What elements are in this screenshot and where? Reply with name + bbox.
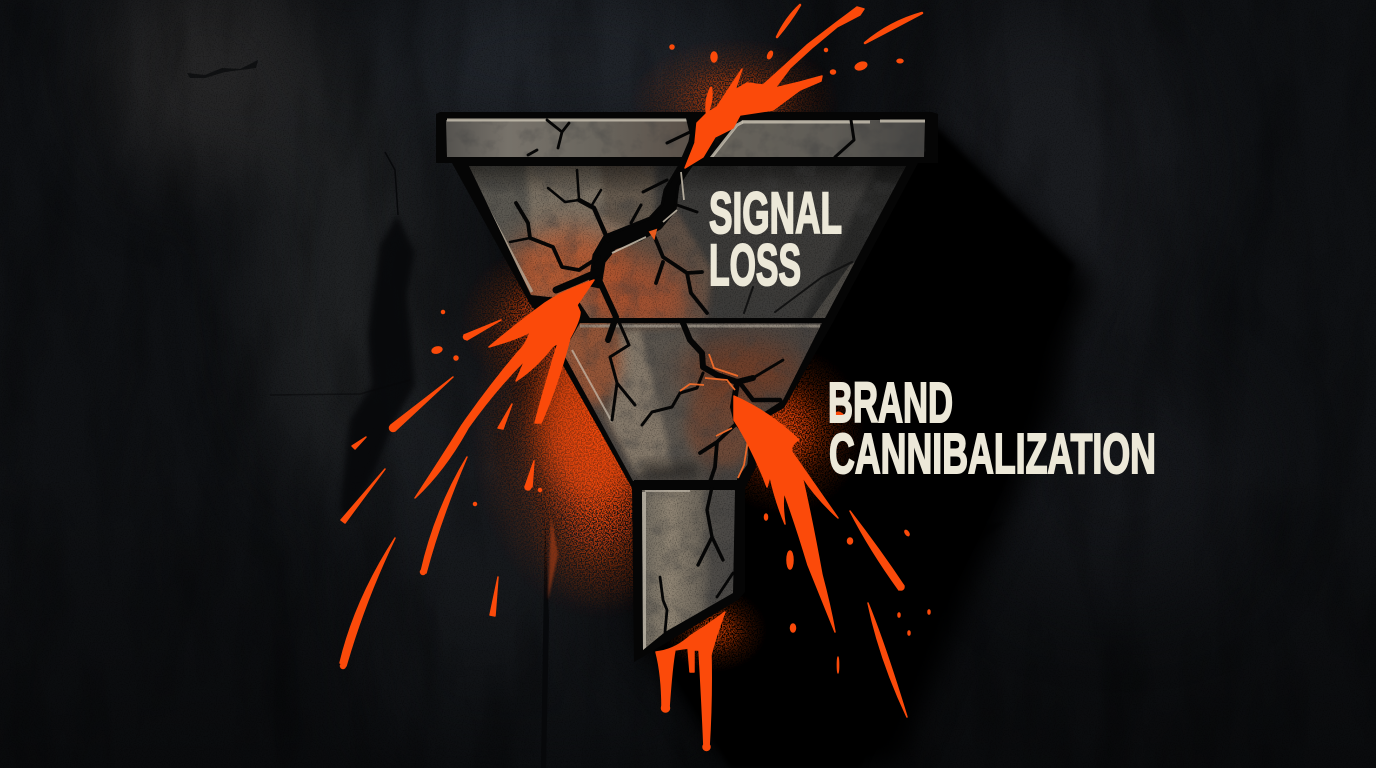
funnel [436, 112, 938, 662]
orange splatter [340, 5, 930, 750]
funnel cast shadow [640, 116, 1095, 768]
wall crack [187, 60, 1005, 768]
section 1: upper cone [469, 166, 906, 318]
orange spray glow [460, 38, 865, 672]
right splash [734, 396, 838, 632]
left streaks [391, 377, 453, 431]
rim [436, 120, 938, 163]
section joint lines [578, 319, 830, 487]
right streaks [850, 511, 904, 590]
section 2: middle cone [566, 323, 822, 481]
heading: BRAND CANNIBALIZATION: CANNIBALIZATION [829, 422, 1156, 486]
heading: BRAND CANNIBALIZATION [828, 371, 1156, 486]
funnel black outline [436, 112, 938, 662]
cracks [510, 116, 854, 632]
left splash [415, 280, 594, 498]
crack highlights and molten edges [612, 172, 748, 478]
heading: BRAND CANNIBALIZATION: BRAND [828, 371, 953, 435]
heading: SIGNAL LOSS: SIGNAL [709, 181, 842, 246]
heading: SIGNAL LOSS: LOSS [709, 233, 801, 298]
top splash [685, 7, 864, 168]
bottom drips [656, 612, 725, 748]
section 3: spout [642, 490, 735, 650]
heading: SIGNAL LOSS [709, 181, 842, 298]
droplets [431, 346, 443, 354]
